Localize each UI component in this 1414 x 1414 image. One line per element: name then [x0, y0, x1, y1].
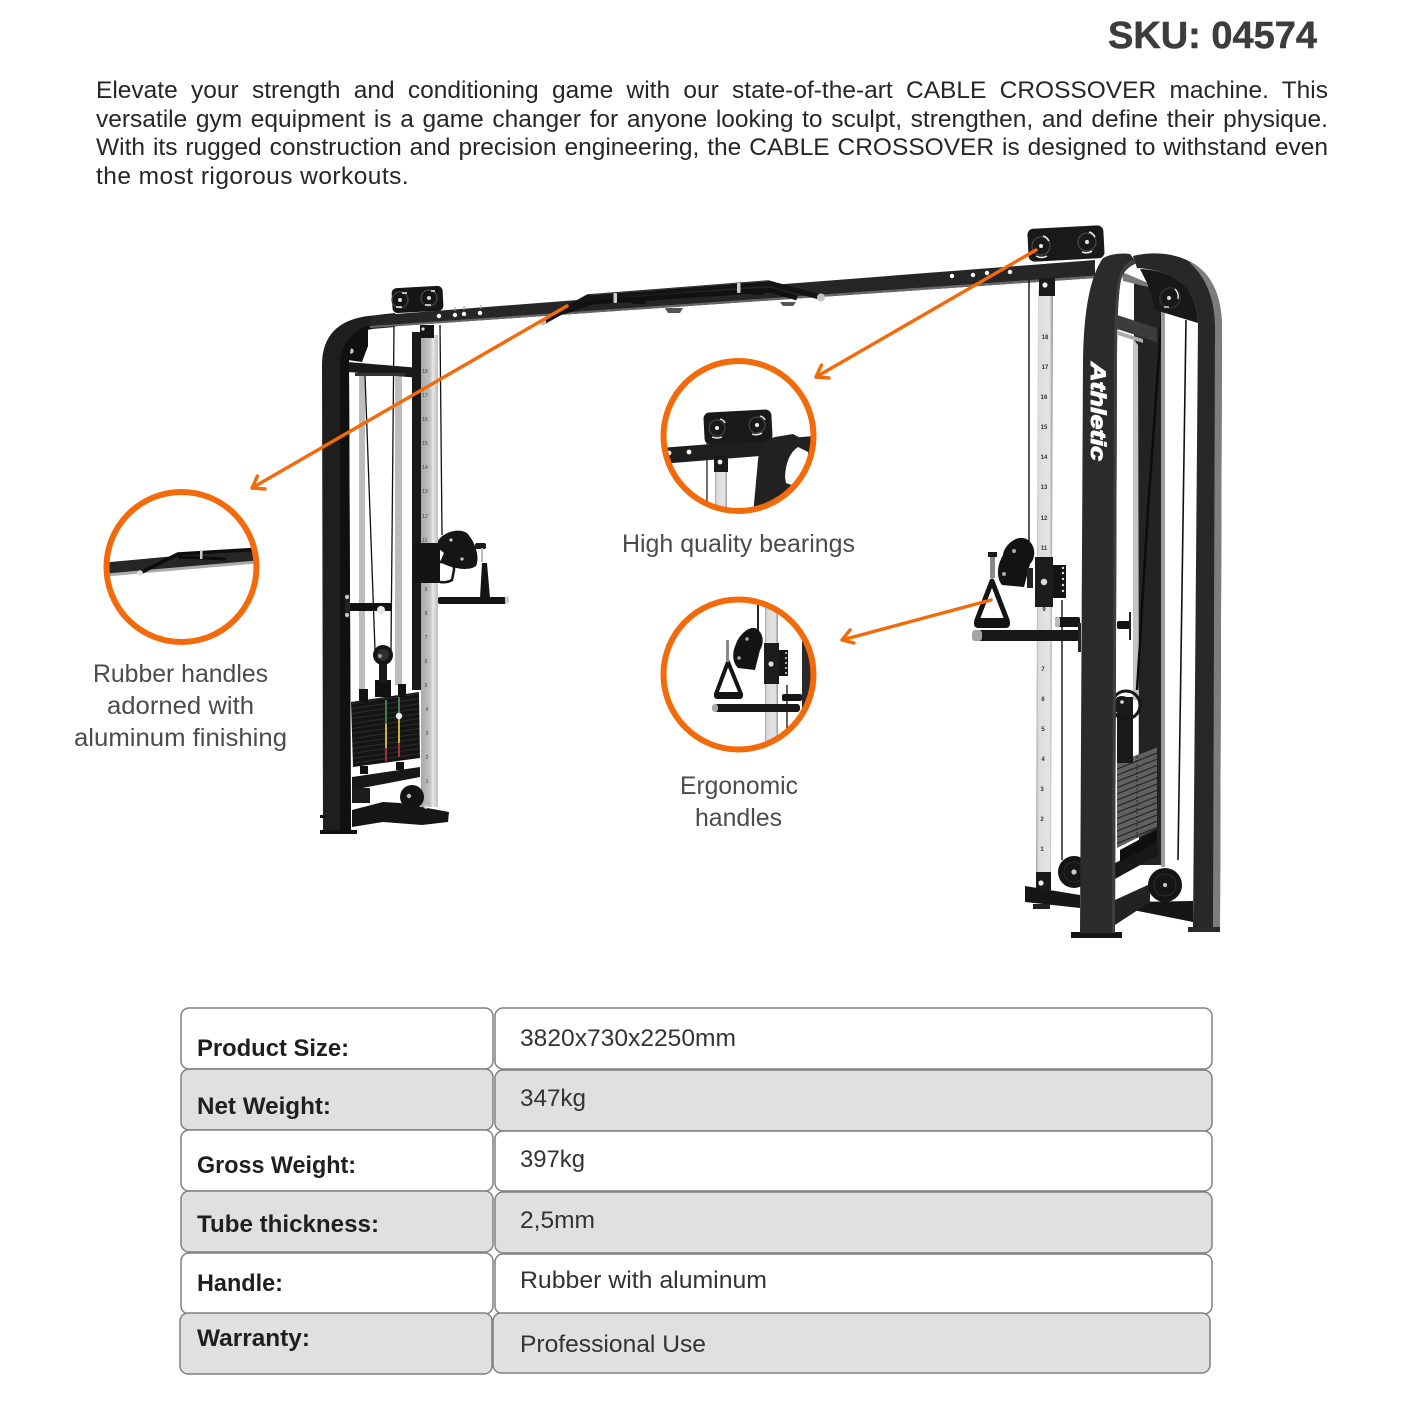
callout arrow: handles — [252, 306, 567, 489]
right carriage — [1035, 557, 1053, 607]
row: product size: 3820x730x2250mm — [520, 1025, 736, 1052]
caption: ergonomic handles: Ergonomic — [680, 772, 798, 800]
row: net weight — [181, 1069, 1212, 1131]
right rear column — [1133, 340, 1138, 700]
left carriage and handle — [413, 543, 440, 583]
row: handle: Rubber with aluminum — [520, 1267, 767, 1294]
intro paragraph — [96, 77, 1328, 190]
caption: rubber handles: aluminum finishing — [74, 724, 287, 752]
left post scale: 5 — [425, 683, 428, 689]
brand name on upright: Athletic — [1086, 361, 1109, 461]
specification table — [180, 1008, 1212, 1374]
caption: ergonomic handles: handles — [695, 804, 782, 832]
callout circle: bearings — [660, 361, 815, 515]
row: gross weight: 397kg — [520, 1146, 585, 1173]
tabs under beam — [665, 302, 796, 313]
intro paragraph: Elevate your strength and conditioning game with our state-of-the-art CABLE CROSSOVER machine. This — [96, 77, 1328, 104]
right post scale — [1040, 335, 1049, 853]
cable crossover machine — [320, 225, 1222, 938]
left post scale: 16 — [422, 417, 428, 423]
right post scale: 14 — [1041, 455, 1048, 461]
row: gross weight — [181, 1130, 1212, 1191]
right tower — [972, 253, 1222, 938]
right front upright arch — [1080, 254, 1137, 933]
left post scale — [422, 369, 429, 785]
row: gross weight: Gross Weight: — [197, 1152, 356, 1179]
left post scale: 17 — [422, 393, 428, 399]
right post scale: 1 — [1040, 847, 1044, 853]
right post scale: 12 — [1041, 516, 1048, 522]
top crossbeam — [370, 260, 1095, 328]
row: warranty: Warranty: — [197, 1325, 310, 1352]
left post scale: 14 — [422, 465, 428, 471]
left post scale: 13 — [422, 489, 428, 495]
left base — [352, 802, 449, 827]
right top pulley plate — [1027, 225, 1105, 262]
left tower — [320, 313, 509, 834]
right post scale: 16 — [1041, 395, 1048, 401]
right post scale: 15 — [1041, 425, 1048, 431]
right post scale: 13 — [1041, 485, 1048, 491]
right post scale: 18 — [1042, 335, 1049, 341]
row: warranty — [180, 1313, 1210, 1374]
right rear arch — [1133, 253, 1222, 927]
left post scale: 2 — [426, 755, 429, 761]
callout arrow: ergonomic handles — [842, 600, 991, 643]
row: tube thickness: 2,5mm — [520, 1207, 595, 1234]
right post scale: 7 — [1041, 667, 1045, 673]
SKU heading: SKU: 04574 — [1108, 15, 1317, 57]
left post scale: 11 — [422, 538, 428, 544]
caption: rubber handles: Rubber handles — [93, 660, 268, 688]
callout circle: ergonomic handles — [664, 600, 818, 760]
right post scale: 2 — [1040, 817, 1044, 823]
row: tube thickness: Tube thickness: — [197, 1211, 379, 1238]
row: warranty: Professional Use — [520, 1331, 706, 1358]
right post scale: 8 — [1041, 637, 1045, 643]
intro paragraph: the most rigorous workouts. — [96, 163, 409, 190]
left stub bar — [345, 603, 392, 611]
caption: ergonomic handles — [680, 772, 798, 832]
right post scale: 4 — [1041, 757, 1045, 763]
row: net weight: 347kg — [520, 1085, 586, 1112]
row: product size — [181, 1008, 1212, 1069]
callout circle: rubber handles — [100, 492, 262, 642]
row: product size: Product Size: — [197, 1035, 349, 1062]
intro paragraph: versatile gym equipment is a game changer for anyone looking to sculpt, strengthen, and define their physique. — [96, 106, 1328, 133]
row: handle — [181, 1253, 1212, 1314]
right post scale: 5 — [1041, 727, 1045, 733]
left post scale: 7 — [425, 635, 428, 641]
left silver post — [421, 335, 438, 807]
left post scale: 18 — [422, 369, 428, 375]
intro paragraph: With its rugged construction and precision engineering, the CABLE CROSSOVER is designed to withstand even — [96, 134, 1328, 161]
right post scale: 17 — [1042, 365, 1049, 371]
right stub bars — [1055, 617, 1080, 627]
right long bar — [974, 630, 1080, 641]
right post scale: 11 — [1041, 546, 1048, 552]
left top pulley plate — [391, 286, 444, 313]
left post scale: 8 — [425, 611, 428, 617]
row: tube thickness — [181, 1191, 1212, 1253]
right post scale: 9 — [1042, 607, 1046, 613]
right triangle handle — [977, 581, 1007, 620]
left post scale: 4 — [426, 707, 429, 713]
right silver post — [1036, 290, 1053, 875]
left upright arch — [322, 313, 395, 832]
caption: rubber handles — [74, 660, 287, 752]
row: net weight: Net Weight: — [197, 1093, 331, 1120]
right pulley cam — [998, 538, 1034, 587]
right post scale: 3 — [1040, 787, 1044, 793]
right cables — [1029, 280, 1062, 860]
left post scale: 1 — [426, 779, 429, 785]
bar handle — [563, 290, 797, 312]
left post scale: 3 — [426, 731, 429, 737]
left post scale: 15 — [422, 441, 428, 447]
caption: rubber handles: adorned with — [107, 692, 254, 720]
left weight stack — [351, 692, 420, 767]
left post scale: 12 — [422, 514, 428, 520]
caption: high quality bearings: High quality bearings — [622, 530, 855, 558]
right post scale: 6 — [1041, 697, 1045, 703]
right weight stack — [1117, 747, 1157, 848]
row: handle: Handle: — [197, 1270, 283, 1297]
right base — [1025, 886, 1080, 908]
left post scale: 9 — [425, 587, 428, 593]
left post scale: 6 — [425, 659, 428, 665]
callout arrow: bearings — [816, 250, 1036, 378]
